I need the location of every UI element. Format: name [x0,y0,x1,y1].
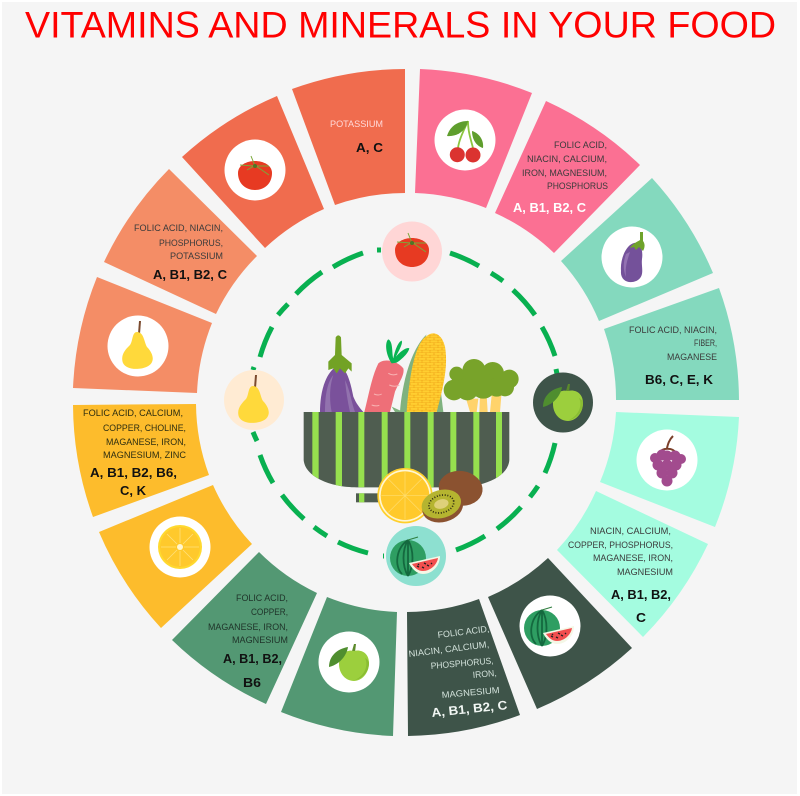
dashed ring [253,250,557,556]
text: watermelon minerals [408,624,500,700]
text: eggplant vitamins: B6, C, E, K [645,373,713,387]
corn [392,333,446,412]
text: watermelon vitamins: A, B1, B2, C [431,698,508,720]
text: tomato minerals: POTASSIUM [330,119,383,129]
text: watermelon minerals: NIACIN, CALCIUM, [408,639,490,659]
text: grapes minerals: COPPER, PHOSPHORUS, [568,540,673,550]
panel: watermelon icon [488,558,632,709]
eggplant [320,335,363,412]
text: eggplant minerals: MAGANESE [667,352,717,362]
text: orange minerals: MAGANESE, IRON, [106,437,186,447]
text: grapes vitamins [611,588,671,625]
icon: cherries [447,121,483,162]
text: orange vitamins [90,466,177,498]
carrot [364,339,409,412]
text: watermelon minerals: PHOSPHORUS, [430,656,494,671]
text: cherry minerals: PHOSPHORUS [547,181,608,191]
text: watermelon minerals: FOLIC ACID, [437,624,490,640]
icon: tomato [238,156,272,190]
small icon: apple badge [533,372,593,432]
title: VITAMINS AND MINERALS IN YOUR FOOD [25,4,776,46]
text: watermelon minerals: MAGNESIUM [441,685,500,700]
bowl [304,412,509,502]
text: pear minerals [134,223,223,261]
icon: eggplant [621,232,645,282]
text: pear vitamins: A, B1, B2, C [153,268,227,282]
text: orange vitamins: A, B1, B2, B6, [90,466,177,480]
panel: eggplant icon [561,178,713,321]
icon: watermelon [524,607,574,646]
central basket illustration [304,333,519,527]
small icon: watermelon badge [386,526,446,586]
panel: pear nutrients [104,169,257,314]
text: cherry minerals: FOLIC ACID, [554,140,607,150]
text: grapes minerals: MAGANESE, IRON, [593,553,673,563]
text: apple vitamins: A, B1, B2, [223,652,282,666]
text: apple minerals: COPPER, [251,607,288,617]
text: grapes vitamins: A, B1, B2, [611,588,671,602]
panel: pear icon [73,277,212,393]
panel: cherry nutrients [495,101,640,253]
small icon: tomato badge [382,222,442,282]
text: orange minerals: MAGNESIUM, ZINC [103,450,186,460]
text: grapes minerals: NIACIN, CALCIUM, [590,526,671,536]
icon: orange slice [158,525,202,569]
kiwi back [436,468,485,509]
small icon: pear badge [224,370,284,430]
panel: apple icon [281,597,397,736]
text: cherry vitamins: A, B1, B2, C [513,201,586,215]
text: cherry minerals [522,140,608,191]
panel: grapes icon [600,412,739,527]
text: apple vitamins: B6 [243,676,261,690]
panel: watermelon nutrients [407,599,520,736]
kiwi slice [418,485,466,527]
text: pear minerals: PHOSPHORUS, [159,238,223,248]
text: eggplant minerals [629,325,717,362]
broccoli [444,359,519,412]
panel: orange icon [99,485,252,628]
panel: tomato nutrients [292,69,405,205]
text: tomato vitamins: A, C [356,141,383,155]
text: cherry minerals: IRON, MAGNESIUM, [522,168,607,178]
panel: eggplant nutrients [604,288,739,400]
text: orange minerals [83,408,186,460]
panel: orange nutrients [73,404,209,517]
text: pear minerals: FOLIC ACID, NIACIN, [134,223,223,233]
panel: apple nutrients [172,552,317,704]
icon: grapes [650,436,686,486]
text: grapes vitamins: C [636,611,646,625]
text: apple vitamins [223,652,282,690]
icon: apple [329,644,369,681]
text: apple minerals [208,593,288,645]
text: eggplant minerals: FIBER, [694,338,717,348]
text: orange minerals: COPPER, CHOLINE, [103,423,186,433]
panel: tomato icon [182,96,324,248]
text: eggplant minerals: FOLIC ACID, NIACIN, [629,325,717,335]
icon: pear [122,321,153,369]
text: orange vitamins: C, K [120,484,146,498]
text: cherry minerals: NIACIN, CALCIUM, [527,154,607,164]
text: grapes minerals: MAGNESIUM [617,567,673,577]
text: apple minerals: FOLIC ACID, [236,593,288,603]
panel: cherry icon [415,69,532,208]
panel: grapes nutrients [557,491,708,637]
text: orange minerals: FOLIC ACID, CALCIUM, [83,408,183,418]
orange slice [377,468,433,523]
text: grapes minerals [568,526,673,577]
text: pear minerals: POTASSIUM [170,251,223,261]
text: apple minerals: MAGNESIUM [232,635,288,645]
text: watermelon minerals: IRON, [472,668,497,680]
text: apple minerals: MAGANESE, IRON, [208,622,288,632]
